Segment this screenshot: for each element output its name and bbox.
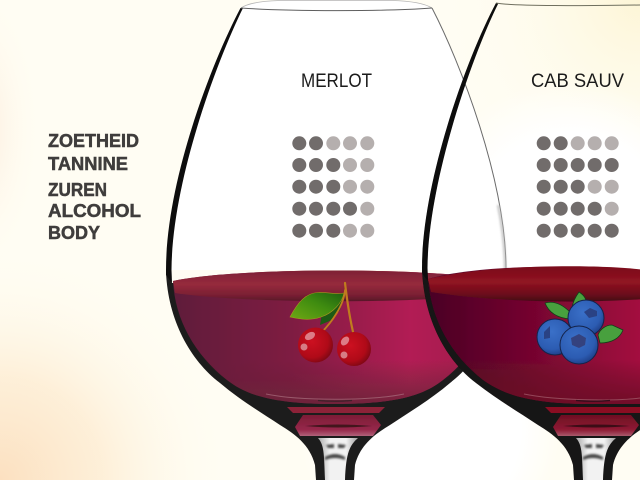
row labels [48, 131, 141, 243]
icon: blueberries [537, 292, 623, 364]
wine base highlight [524, 394, 640, 400]
right rim line [432, 8, 506, 270]
glass base wine reflection [295, 415, 381, 436]
cab sauv wine depth shade [463, 360, 640, 404]
icon: cherries [290, 283, 371, 366]
wine base dark arc [576, 400, 610, 402]
base dark marks [305, 424, 372, 428]
cab sauv wine body [428, 267, 640, 404]
glass base wine reflection [553, 415, 639, 436]
label: tannine: TANNINE [48, 154, 128, 174]
panel: merlot glass [166, 0, 506, 480]
stem dark marks [325, 444, 346, 460]
rim back [241, 0, 432, 8]
cab sauv wine surface band [428, 266, 640, 301]
glass lower bowl and stem silhouette [166, 272, 504, 480]
wine base highlight [266, 394, 404, 399]
label: zoetheid: ZOETHEID [48, 131, 139, 151]
left rim line [166, 8, 243, 283]
label: alcohol: ALCOHOL [48, 201, 141, 221]
glass lower bowl and stem silhouette [422, 270, 640, 480]
rim front [241, 8, 432, 11]
left rim line [422, 3, 498, 281]
base dark marks [563, 424, 630, 428]
label: body: BODY [48, 223, 100, 243]
heading: cab sauv: CAB SAUV [531, 70, 624, 92]
glass base inner reflection [287, 407, 385, 413]
merlot wine body [173, 270, 497, 404]
merlot wine surface band [173, 270, 497, 301]
heading: merlot: MERLOT [301, 70, 372, 92]
wine base dark arc [318, 400, 352, 402]
right wall thickening [498, 205, 505, 270]
label: zuren: ZUREN [48, 180, 107, 200]
glass bowl interior [166, 8, 506, 270]
stem highlight [318, 438, 358, 480]
merlot wine depth shade [205, 360, 465, 404]
stem highlight [576, 438, 616, 480]
rim [496, 3, 640, 6]
glass base inner reflection [545, 407, 640, 413]
dot ratings: cab sauv [537, 136, 619, 238]
panel: cab sauv glass [422, 3, 640, 480]
stem dark marks [583, 444, 604, 460]
dot ratings: merlot [292, 136, 374, 238]
